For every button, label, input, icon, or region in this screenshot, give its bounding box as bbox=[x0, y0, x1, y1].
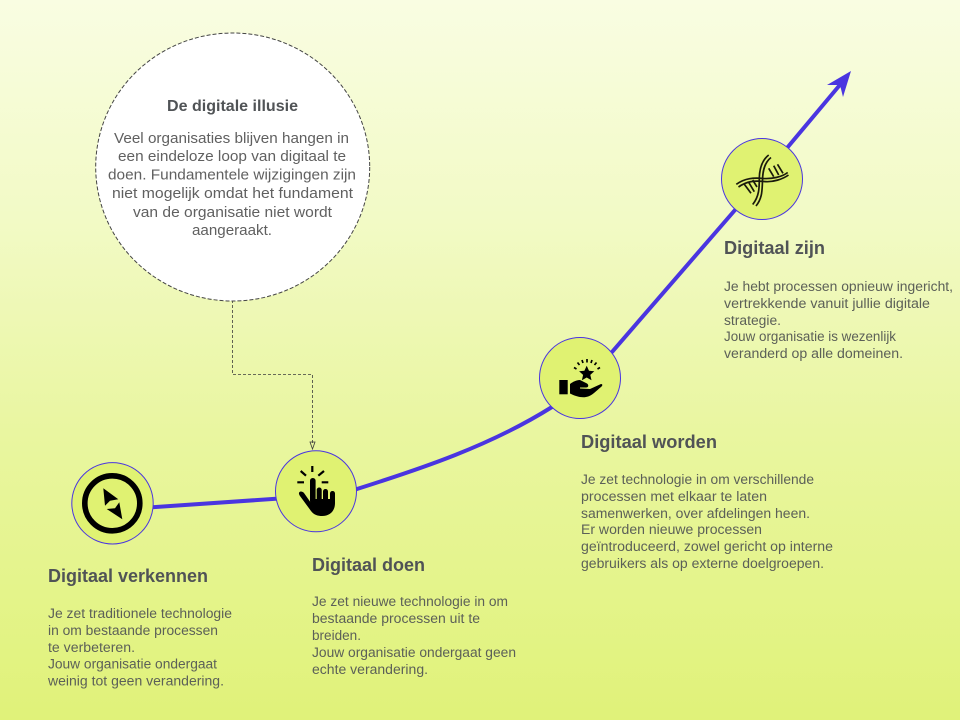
arrow head bbox=[827, 71, 851, 97]
callout heading: De digitale illusie bbox=[167, 98, 298, 115]
text: Er worden nieuwe processen bbox=[581, 522, 762, 537]
icon: compass bbox=[85, 476, 140, 531]
callout text bbox=[108, 130, 356, 239]
node: hand with star icon bbox=[540, 338, 620, 418]
text: samenwerken, over afdelingen heen. bbox=[581, 506, 810, 521]
heading: Digitaal doen bbox=[312, 555, 425, 575]
dashed connector bbox=[232, 300, 312, 444]
callout text: niet mogelijk omdat het fundament bbox=[112, 185, 354, 202]
text: veranderd op alle domeinen. bbox=[724, 346, 903, 361]
text: breiden. bbox=[312, 628, 361, 643]
callout text: aangeraakt. bbox=[192, 222, 272, 239]
text: Jouw organisatie ondergaat bbox=[48, 656, 217, 672]
heading: Digitaal verkennen bbox=[48, 566, 208, 586]
heading: Digitaal zijn bbox=[724, 238, 825, 258]
text: gebruikers als op externe doelgroepen. bbox=[581, 556, 824, 571]
text: geïntroduceerd, zowel gericht op interne bbox=[581, 539, 833, 554]
text: Je zet traditionele technologie bbox=[48, 606, 232, 621]
icon: pointing hand bbox=[297, 466, 335, 516]
text: processen met elkaar te laten bbox=[581, 489, 767, 504]
block: Digitaal doen bbox=[312, 555, 516, 677]
text bbox=[47, 606, 232, 688]
text: vertrekkende vanuit jullie digitale bbox=[724, 296, 930, 311]
text bbox=[724, 279, 953, 361]
text: in om bestaande processen bbox=[48, 623, 218, 638]
connector arrowhead bbox=[310, 442, 315, 449]
text: Je hebt processen opnieuw ingericht, bbox=[724, 279, 953, 294]
heading: Digitaal worden bbox=[581, 432, 717, 452]
text bbox=[581, 472, 833, 571]
text: Jouw organisatie is wezenlijk bbox=[724, 329, 896, 344]
icon: hand with star bbox=[559, 359, 602, 397]
text: Jouw organisatie ondergaat geen bbox=[312, 645, 516, 660]
block: Digitaal worden bbox=[581, 432, 833, 571]
node: hand click icon bbox=[276, 451, 356, 532]
callout text: Veel organisaties blijven hangen in bbox=[114, 130, 349, 147]
block: Digitaal verkennen bbox=[47, 566, 232, 688]
text: strategie. bbox=[724, 313, 781, 328]
growth curve arrow bbox=[112, 71, 851, 510]
callout text: doen. Fundamentele wijzigingen zijn bbox=[108, 166, 356, 184]
text: bestaande processen uit te bbox=[312, 611, 480, 626]
callout text: van de organisatie niet wordt bbox=[133, 204, 333, 221]
text: Je zet technologie in om verschillende bbox=[581, 472, 814, 487]
block: Digitaal zijn bbox=[724, 238, 953, 361]
text: weinig tot geen verandering. bbox=[47, 674, 224, 688]
node: compass icon bbox=[72, 463, 153, 544]
text: echte verandering. bbox=[312, 662, 428, 677]
callout: De digitale illusie bbox=[96, 33, 370, 301]
text: te verbeteren. bbox=[48, 640, 135, 655]
text bbox=[312, 594, 516, 677]
callout text: een eindeloze loop van digitaal te bbox=[118, 148, 346, 165]
node: DNA icon bbox=[722, 138, 802, 220]
text: Je zet nieuwe technologie in om bbox=[312, 594, 508, 609]
icon: DNA helix bbox=[736, 155, 788, 206]
